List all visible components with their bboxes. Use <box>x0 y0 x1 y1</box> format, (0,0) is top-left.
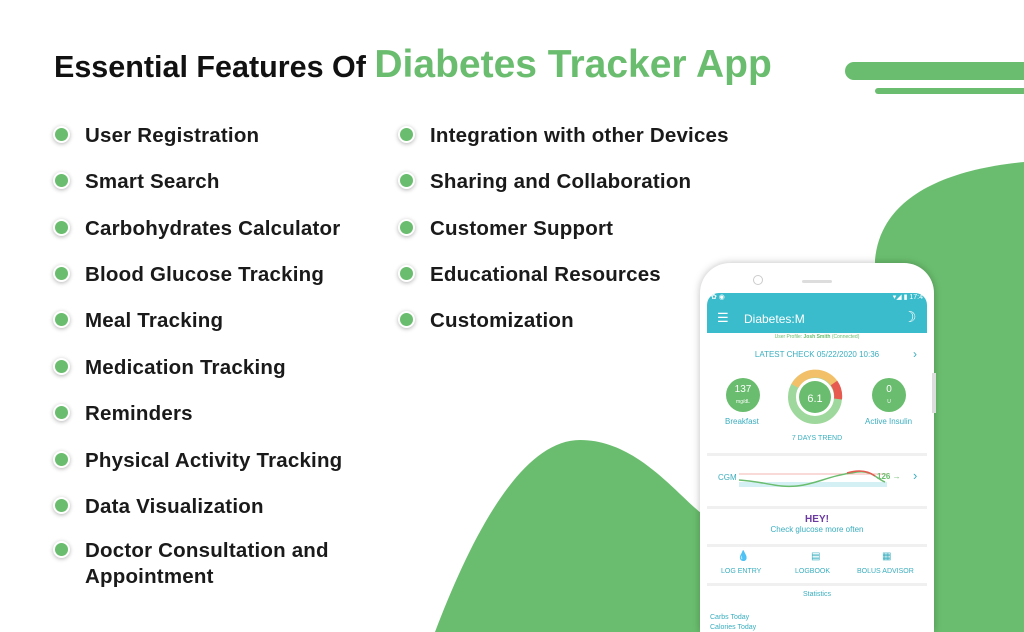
phone mockup <box>700 263 934 632</box>
left feature list: Carbohydrates Calculator <box>85 217 340 240</box>
right feature list: Sharing and Collaboration <box>430 170 691 193</box>
phone mockup: › <box>913 347 917 361</box>
phone mockup: 7 DAYS TREND <box>792 435 842 442</box>
title: Essential Features Of Diabetes Tracker App <box>54 43 772 86</box>
phone mockup: Carbs Today <box>710 614 749 621</box>
phone mockup: Active Insulin <box>865 417 912 426</box>
action buttons: LOG ENTRY <box>721 568 761 575</box>
left feature list: User Registration <box>85 124 259 147</box>
action buttons <box>707 544 927 581</box>
right feature list <box>396 124 729 332</box>
action buttons: LOGBOOK <box>795 568 830 575</box>
phone mockup: Statistics <box>803 591 831 598</box>
app header: ▾◢ ▮ 17:4 <box>893 294 923 301</box>
right feature list: Customization <box>430 309 574 332</box>
app header: ☰ <box>717 310 729 325</box>
action buttons: 💧 <box>737 551 749 562</box>
readings: mg/dL <box>736 399 750 405</box>
right feature list: Integration with other Devices <box>430 124 729 147</box>
app header <box>707 293 927 333</box>
phone mockup: Calories Today <box>710 624 756 631</box>
CGM chart: 126 → <box>877 472 901 481</box>
app header: ☽ <box>903 309 916 326</box>
action buttons: BOLUS ADVISOR <box>857 568 914 575</box>
left feature list: Meal Tracking <box>85 309 223 332</box>
left feature list: Physical Activity Tracking <box>85 449 342 472</box>
right feature list: Educational Resources <box>430 263 661 286</box>
app header: ✿ ◉ <box>711 294 725 301</box>
left feature list: Doctor Consultation and <box>85 539 329 562</box>
phone mockup: LATEST CHECK 05/22/2020 10:36 <box>755 350 879 359</box>
phone mockup: U <box>887 399 891 405</box>
action buttons: ▦ <box>882 551 891 562</box>
left feature list <box>50 124 342 588</box>
HEY callout: Check glucose more often <box>771 525 863 534</box>
readings: 137 <box>735 384 751 395</box>
left feature list: Appointment <box>85 565 214 588</box>
CGM chart <box>707 453 927 506</box>
readings <box>726 378 760 412</box>
left feature list: Reminders <box>85 402 193 425</box>
left feature list: Data Visualization <box>85 495 264 518</box>
HEY callout: HEY! <box>805 514 829 525</box>
left feature list: Medication Tracking <box>85 356 286 379</box>
left feature list: Smart Search <box>85 170 220 193</box>
HEY callout <box>707 506 927 543</box>
phone mockup: User Profile: Josh Smith (Connected) <box>775 334 859 340</box>
right feature list: Customer Support <box>430 217 613 240</box>
CGM chart: › <box>913 468 917 483</box>
phone mockup: 0 <box>886 384 892 395</box>
phone mockup: 6.1 <box>807 393 823 405</box>
action buttons: ▤ <box>811 551 820 562</box>
left feature list: Blood Glucose Tracking <box>85 263 324 286</box>
CGM chart: CGM <box>718 473 737 482</box>
decorative bars <box>845 62 1024 80</box>
phone mockup: Breakfast <box>725 417 759 426</box>
app header: Diabetes:M <box>744 312 805 326</box>
